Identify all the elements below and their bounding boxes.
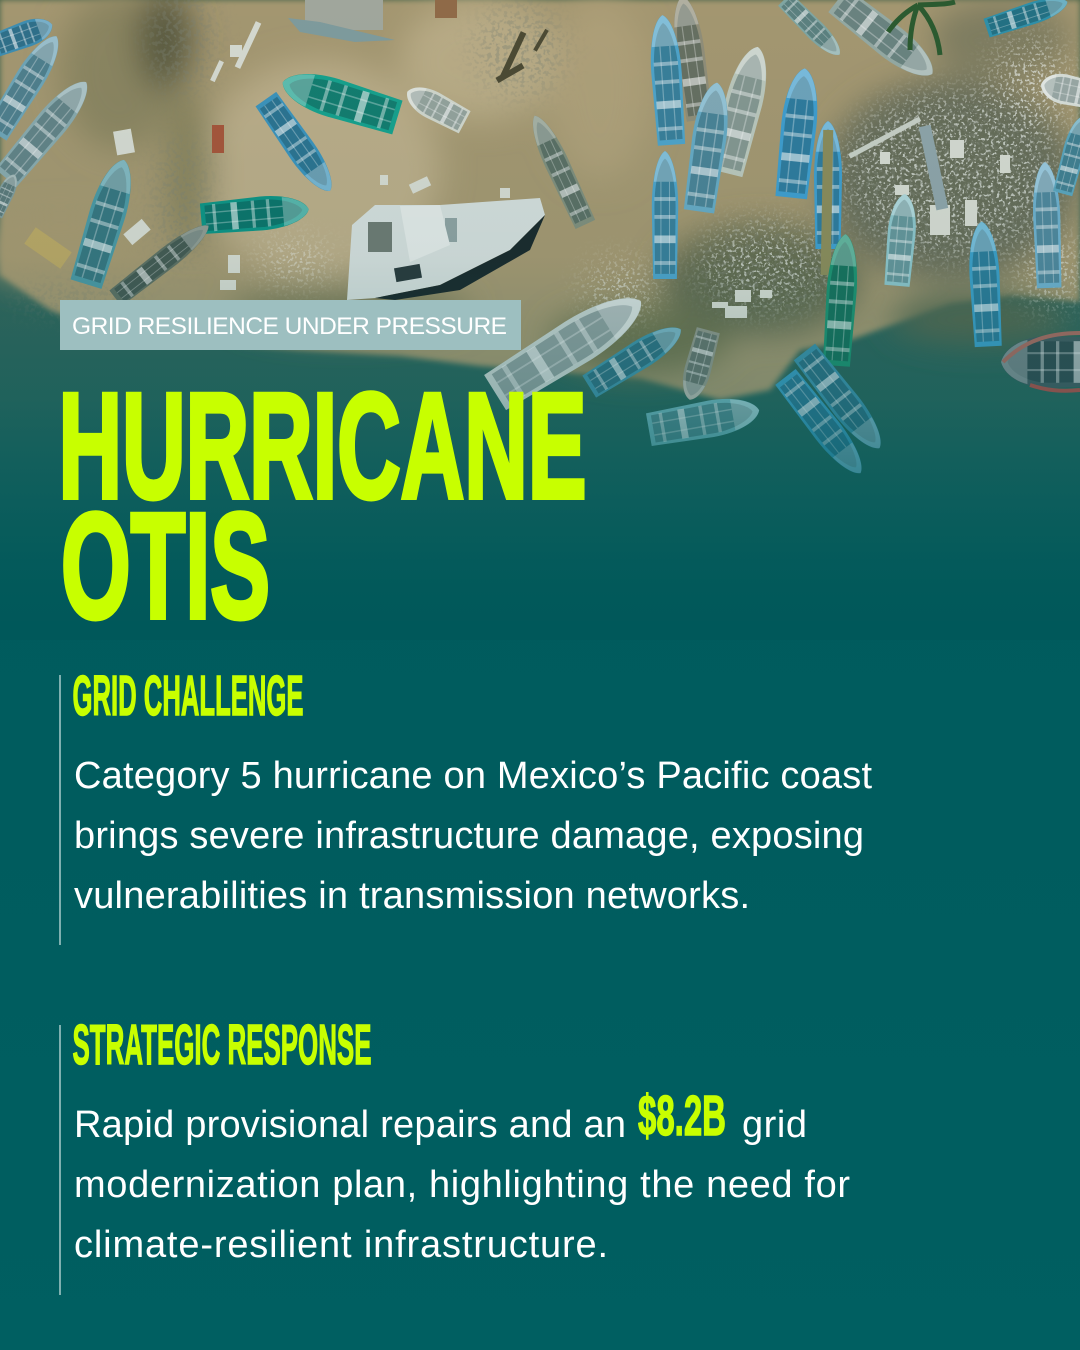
orange crate xyxy=(212,125,224,153)
text: grid challenge body: Category 5 hurricane on Mexico’s Pacific coast xyxy=(74,755,872,797)
panel: strategic response: STRATEGIC RESPONSE xyxy=(72,1013,372,1077)
text: strategic response body: Rapid provisional repairs and an xyxy=(74,1104,626,1146)
text: strategic response body: climate-resilient infrastructure. xyxy=(74,1224,608,1266)
title: HURRICANE xyxy=(58,362,586,530)
sand beach xyxy=(0,0,1080,400)
text: strategic response body: modernization plan, highlighting the need for xyxy=(74,1164,850,1206)
tag label: GRID RESILIENCE UNDER PRESSURE xyxy=(72,313,507,340)
title: OTIS xyxy=(61,482,270,650)
upper wooden hut boat xyxy=(305,0,383,30)
light and dark sand patches xyxy=(0,0,1075,374)
text: strategic response body xyxy=(74,1104,850,1266)
dark boat with red edge xyxy=(1001,336,1080,388)
title xyxy=(58,362,586,650)
debris speckle xyxy=(259,40,1078,316)
debris pieces xyxy=(113,0,1010,318)
long wreck planks xyxy=(919,125,948,210)
white yacht xyxy=(347,198,545,300)
tan crate xyxy=(24,227,72,269)
tag label xyxy=(60,300,521,350)
text: grid challenge body: vulnerabilities in transmission networks. xyxy=(74,875,750,917)
figure: $8.2B: $8.2B xyxy=(638,1084,726,1148)
panel: strategic response xyxy=(59,1013,850,1295)
text: grid challenge body: brings severe infrastructure damage, exposing xyxy=(74,815,864,857)
palm fronds xyxy=(888,2,955,55)
text: strategic response body: grid xyxy=(742,1104,807,1146)
scrap at top center xyxy=(496,29,549,83)
teal photo overlay xyxy=(0,0,1080,640)
photo: wrecked boats on beach xyxy=(0,0,1080,640)
boats xyxy=(0,13,57,57)
panel: grid challenge: GRID CHALLENGE xyxy=(72,664,304,728)
panel: grid challenge xyxy=(59,664,872,945)
text: grid challenge body xyxy=(74,755,872,917)
